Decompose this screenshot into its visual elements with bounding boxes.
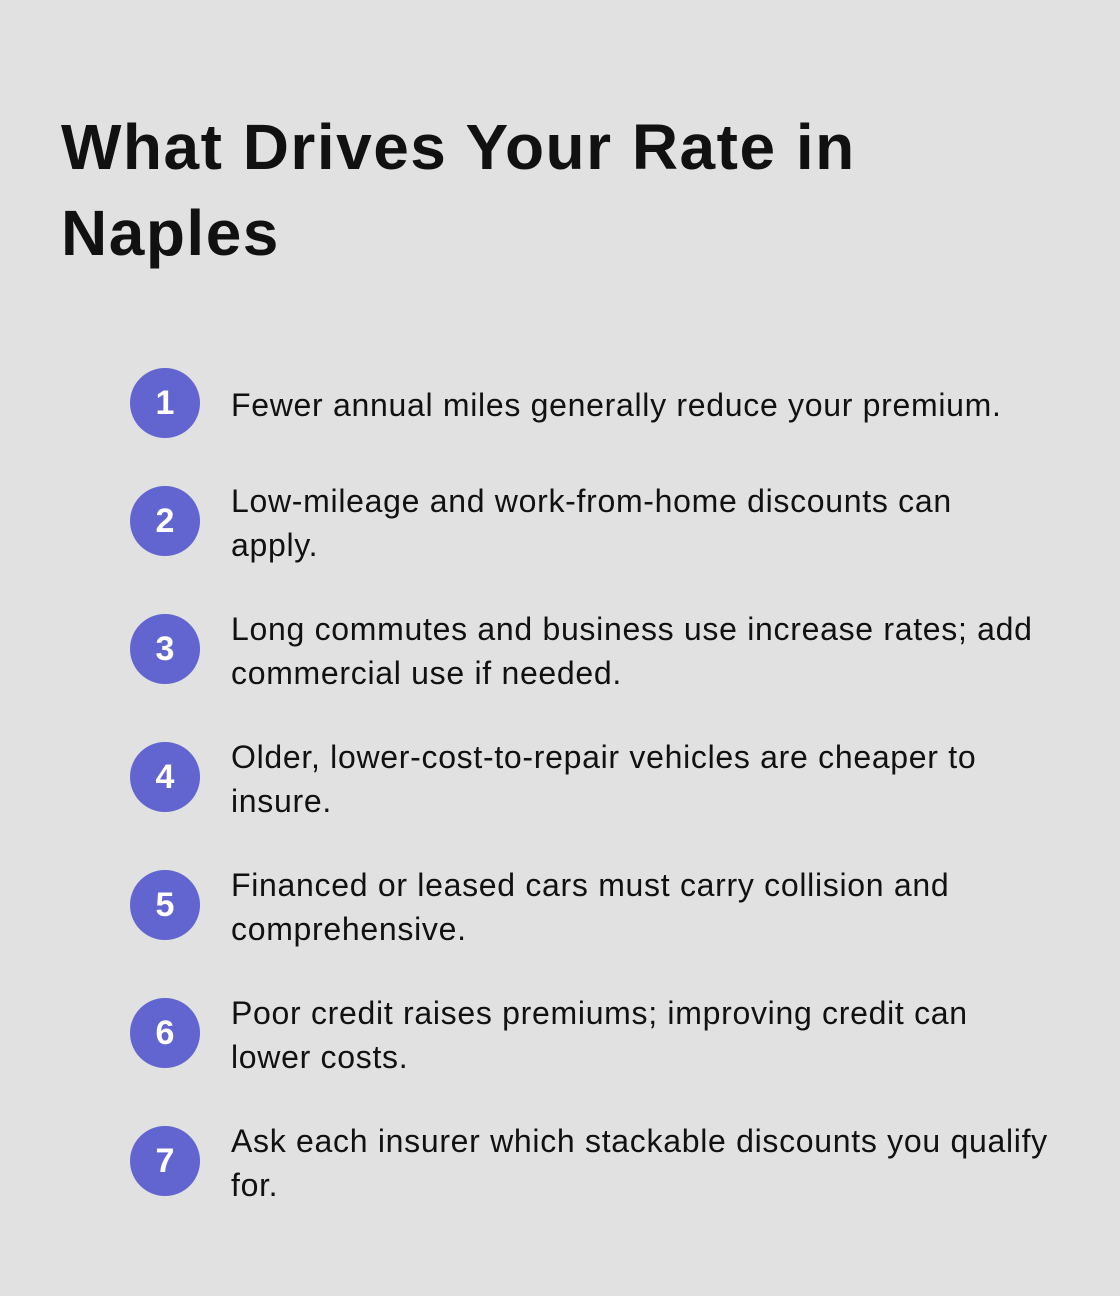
item 3: commercial use if needed. (231, 655, 622, 691)
item 5: Financed or leased cars must carry collision and (231, 867, 949, 903)
item 6 (130, 995, 968, 1075)
title (61, 111, 856, 269)
item 4: Older, lower-cost-to-repair vehicles are cheaper to (231, 739, 976, 775)
item 7: for. (231, 1167, 278, 1203)
item 4: 4 (156, 758, 174, 796)
item 3: 3 (156, 630, 174, 668)
item 2: 2 (156, 502, 174, 540)
item 4: insure. (231, 783, 332, 819)
item 1: Fewer annual miles generally reduce your premium. (231, 387, 1002, 423)
item 1: 1 (156, 384, 174, 422)
item 2: Low-mileage and work-from-home discounts can (231, 483, 952, 519)
title: Naples (61, 197, 280, 269)
item 7 (130, 1123, 1048, 1203)
item 6: lower costs. (231, 1039, 408, 1075)
item 1 (130, 368, 1002, 438)
item 5: comprehensive. (231, 911, 467, 947)
title: What Drives Your Rate in (61, 111, 856, 183)
item 5 (130, 867, 949, 947)
item 3 (130, 611, 1033, 691)
item 3: Long commutes and business use increase rates; add (231, 611, 1033, 647)
item 2: apply. (231, 527, 318, 563)
item 5: 5 (156, 886, 174, 924)
item 2 (130, 483, 952, 563)
item 6: Poor credit raises premiums; improving credit can (231, 995, 968, 1031)
item 6: 6 (156, 1014, 174, 1052)
item 4 (130, 739, 976, 819)
item 7: 7 (156, 1142, 174, 1180)
item 7: Ask each insurer which stackable discounts you qualify (231, 1123, 1048, 1159)
